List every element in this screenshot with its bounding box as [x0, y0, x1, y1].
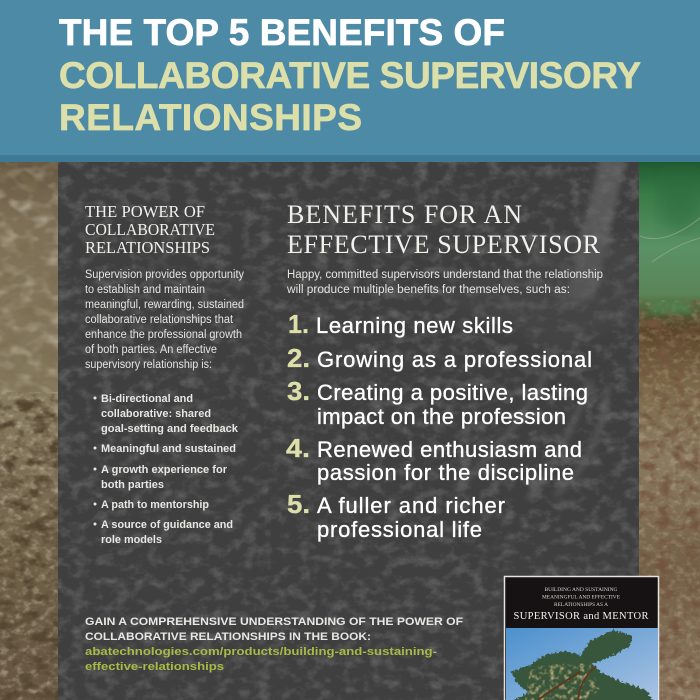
right heading: BENEFITS FOR AN — [287, 200, 522, 229]
book title: MEANINGFUL AND EFFECTIVE — [542, 594, 620, 600]
bullet list: both parties — [101, 479, 164, 491]
left heading: RELATIONSHIPS — [85, 238, 210, 257]
bullet list: A source of guidance and — [101, 519, 233, 531]
left body text: meaningful, rewarding, sustained — [85, 299, 244, 311]
right column: benefits — [286, 200, 603, 542]
book call to action: COLLABORATIVE RELATIONSHIPS IN THE BOOK: — [85, 631, 371, 643]
benefit 5: A fuller and richer — [317, 493, 505, 518]
benefit 4: 4. — [286, 433, 310, 463]
title — [59, 12, 641, 138]
bullet list: role models — [101, 534, 162, 546]
book call to action: GAIN A COMPREHENSIVE UNDERSTANDING OF THE POWER OF — [85, 616, 463, 628]
book title: BUILDING AND SUSTAINING — [544, 587, 618, 593]
intro text — [286, 269, 603, 296]
left body text — [85, 269, 244, 371]
left body text: Supervision provides opportunity — [85, 269, 244, 281]
left body text: supervisory relationship is: — [85, 359, 212, 371]
title: COLLABORATIVE SUPERVISORY — [59, 55, 641, 96]
benefit 3: Creating a positive, lasting — [317, 380, 588, 405]
benefit 4 — [286, 433, 582, 485]
benefit 5 — [287, 489, 505, 542]
benefit 1: 1. — [288, 309, 309, 339]
book call to action: effective-relationships — [85, 661, 224, 673]
benefit 5: 5. — [287, 489, 310, 519]
benefit 3: impact on the profession — [317, 404, 566, 429]
book call to action: abatechnologies.com/products/building-and-sustaining- — [85, 646, 437, 658]
bullet list: collaborative: shared — [101, 408, 211, 420]
left heading — [85, 202, 215, 257]
book call to action — [85, 616, 463, 673]
benefit 3 — [287, 376, 588, 429]
book title — [514, 587, 648, 622]
bullet list: A growth experience for — [101, 464, 228, 476]
benefit 1: Learning new skills — [316, 313, 513, 338]
book cover — [504, 576, 658, 700]
left column: power of relationships — [85, 202, 244, 546]
right heading: EFFECTIVE SUPERVISOR — [287, 230, 601, 259]
benefit 2: 2. — [287, 343, 310, 373]
numbered benefits — [286, 309, 592, 542]
book title: RELATIONSHIPS AS A — [554, 602, 608, 608]
left body text: collaborative relationships that — [85, 314, 234, 326]
title: RELATIONSHIPS — [59, 97, 362, 138]
benefit 3: 3. — [287, 376, 310, 406]
bullet list: Bi-directional and — [101, 393, 193, 405]
intro text: Happy, committed supervisors understand that the relationship — [287, 269, 603, 281]
benefit 5: professional life — [317, 517, 482, 542]
left heading: THE POWER OF — [85, 202, 205, 221]
benefit 2: Growing as a professional — [317, 347, 592, 372]
benefit 4: passion for the discipline — [317, 460, 574, 485]
bullet list: Meaningful and sustained — [101, 443, 236, 455]
bullet list: goal-setting and feedback — [101, 423, 239, 435]
soil and foliage photo: right strip — [639, 162, 700, 700]
soil photo: left strip — [0, 162, 58, 700]
header band — [0, 0, 700, 162]
left body text: of both parties. An effective — [85, 344, 217, 356]
right heading — [287, 200, 601, 259]
panel: dark textured background — [58, 150, 639, 700]
intro text: will produce multiple benefits for themselves, such as: — [286, 284, 570, 296]
bullet list: A path to mentorship — [101, 499, 209, 511]
benefit 4: Renewed enthusiasm and — [317, 437, 582, 462]
book title: SUPERVISOR and MENTOR — [514, 611, 648, 622]
book photo: tree — [506, 628, 658, 700]
left heading: COLLABORATIVE — [85, 220, 215, 239]
title: THE TOP 5 BENEFITS OF — [59, 12, 505, 53]
left body text: enhance the professional growth — [85, 329, 242, 341]
left body text: to establish and maintain — [85, 284, 205, 296]
bullet list — [94, 393, 239, 546]
